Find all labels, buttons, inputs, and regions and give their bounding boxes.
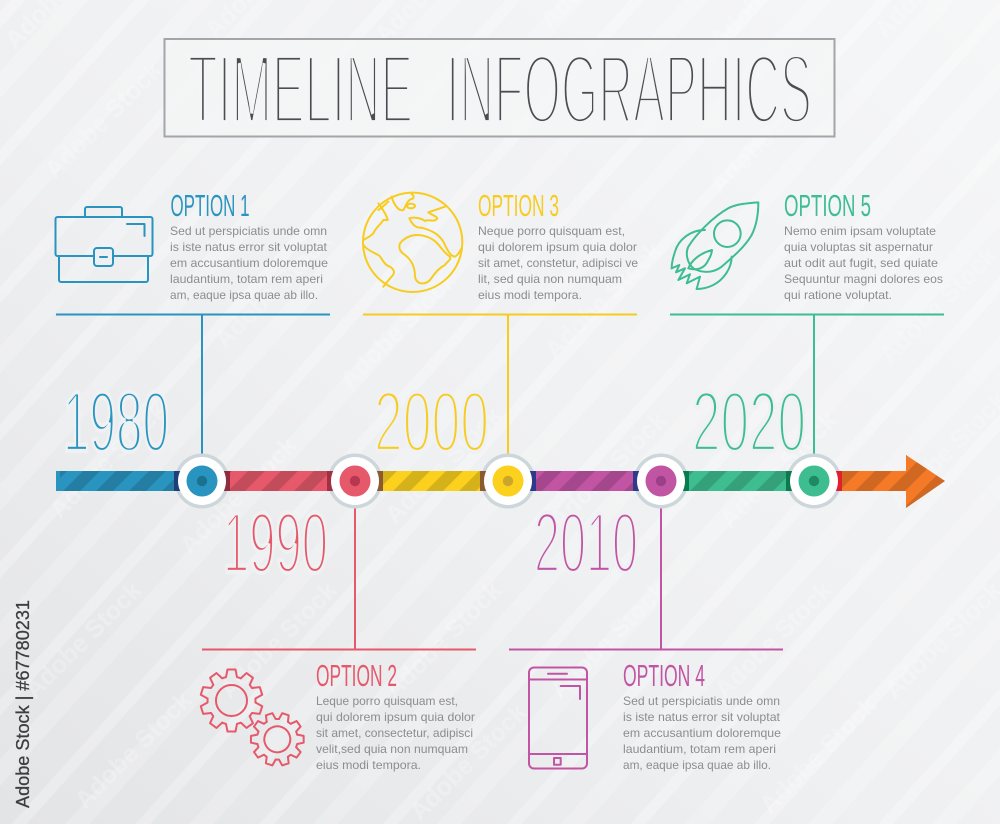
year 1980: 1980: [63, 375, 169, 470]
background: Adobe Stock: [174, 431, 302, 559]
text block: [784, 224, 943, 302]
background: Adobe Stock: [539, 236, 667, 364]
text block: is iste natus error sit voluptat: [623, 710, 781, 724]
icon: globe: [363, 193, 462, 292]
text block: qui dolorem ipsum quia dolor: [478, 240, 637, 254]
stock id label: Adobe Stock | #67780231: [13, 600, 33, 808]
background: Adobe Stock: [379, 401, 507, 529]
panel: option 5: [672, 188, 943, 302]
background: Adobe Stock: [754, 691, 882, 819]
panel: option 3: [363, 188, 638, 302]
panel: option 2: [199, 658, 475, 773]
year 2010: 2010: [534, 496, 638, 591]
timeline bar: [56, 455, 945, 508]
background: Adobe Stock: [44, 396, 172, 524]
heading: OPTION 2: [316, 658, 397, 693]
background: Adobe Stock: [544, 576, 672, 704]
year 2000: 2000: [374, 375, 489, 470]
panel: option 1: [56, 188, 328, 302]
text block: aut odit aut fugit, sed quiate: [784, 256, 938, 270]
text block: qui ratione voluptat.: [784, 288, 892, 302]
icon: gears: [199, 670, 312, 773]
text block: velit,sed quia non numquam: [316, 742, 468, 756]
marker 1980: [174, 454, 230, 508]
background: Adobe Stock: [714, 406, 842, 534]
text block: qui dolorem ipsum quia dolor: [316, 710, 475, 724]
text block: am, eaque ipsa quae ab illo.: [170, 288, 318, 302]
text block: Leque porro quisquam est,: [316, 694, 458, 708]
year 1990: 1990: [223, 496, 328, 591]
text block: eius modi tempora.: [478, 288, 582, 302]
title box: [164, 34, 834, 144]
arrow: [814, 455, 945, 508]
icon: briefcase: [56, 207, 152, 282]
text block: [170, 224, 328, 302]
background: Adobe Stock: [404, 698, 532, 824]
connector lines: [56, 314, 944, 650]
heading: OPTION 4: [623, 658, 705, 693]
text block: eius modi tempora.: [316, 758, 421, 772]
background: Adobe Stock: [379, 576, 507, 704]
icon: smartphone: [529, 668, 587, 768]
panel: option 4: [529, 658, 781, 772]
background: Adobe Stock: [544, 406, 672, 534]
marker 2010: [633, 454, 689, 508]
text block: sit amet, consectetur, adipisci: [316, 726, 473, 740]
background: Adobe Stock: [874, 241, 1000, 369]
text block: [478, 224, 638, 302]
text block: Sed ut perspiciatis unde omn: [170, 224, 327, 238]
text block: Sed ut perspiciatis unde omn: [623, 694, 780, 708]
background: Adobe Stock: [334, 266, 462, 394]
markers: [174, 454, 842, 508]
marker 2020: [786, 454, 842, 508]
background: Adobe Stock: [704, 71, 832, 199]
text block: laudantium, totam rem aperi: [170, 272, 323, 286]
heading: OPTION 5: [784, 188, 871, 223]
text block: em accusantium doloremque: [623, 726, 781, 740]
title box: TIMELINE: [188, 34, 413, 144]
background: Adobe Stock: [209, 226, 337, 354]
text block: Nemo enim ipsam voluptate: [784, 224, 936, 238]
background: Adobe Stock: [69, 686, 197, 814]
heading: OPTION 3: [478, 188, 559, 223]
background: Adobe Stock: [214, 576, 342, 704]
text block: lit, sed quia non numquam: [478, 272, 622, 286]
background: Adobe Stock: [19, 576, 147, 704]
text block: laudantium, totam rem aperi: [623, 742, 776, 756]
year 2020: 2020: [692, 375, 806, 470]
text block: Neque porro quisquam est,: [478, 224, 625, 238]
heading: OPTION 1: [170, 188, 250, 223]
text block: [623, 694, 781, 772]
text block: is iste natus error sit voluptat: [170, 240, 328, 254]
bar stripes: [60, 471, 906, 491]
marker 2000: [480, 454, 536, 508]
background: Adobe Stock: [39, 56, 167, 184]
marker 1990: [327, 454, 383, 508]
icon: rocket: [672, 202, 758, 289]
text block: Sequuntur magni dolores eos: [784, 272, 943, 286]
text block: [316, 694, 475, 772]
background: Adobe Stock: [709, 576, 837, 704]
text block: sit amet, constetur, adipisci ve: [478, 256, 638, 270]
text block: quia voluptas sit aspernatur: [784, 240, 933, 254]
text block: am, eaque ipsa quae ab illo.: [623, 758, 771, 772]
text block: em accusantium doloremque: [170, 256, 328, 270]
